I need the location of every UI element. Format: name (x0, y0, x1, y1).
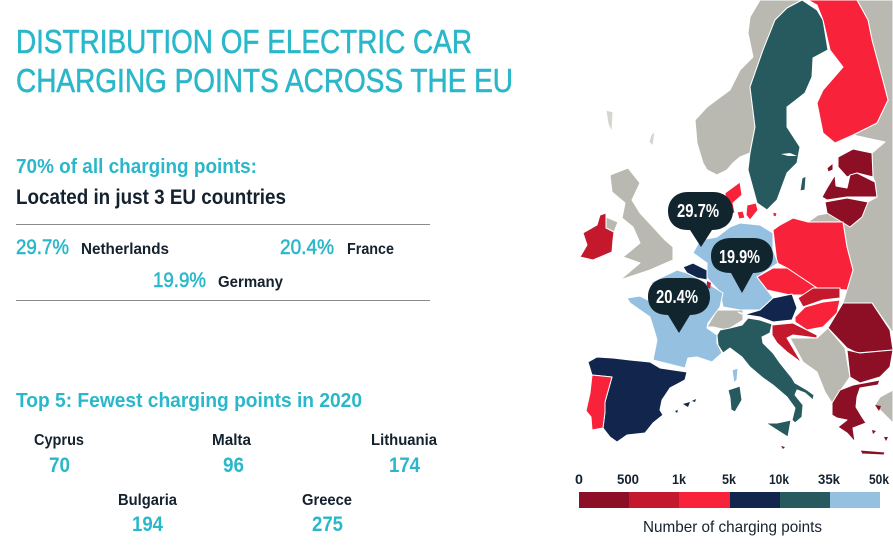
Romania (828, 303, 893, 353)
Luxembourg (707, 281, 711, 289)
panel: top three countries: 29.7% (16, 236, 69, 259)
callout: Germany 19.9%: 19.9% (719, 247, 760, 267)
non-EU land: Russia, Belarus, Ukraine (843, 0, 893, 333)
legend: 50k (869, 471, 889, 487)
Sweden (748, 0, 828, 210)
panel: fewest charging points list: Bulgaria (118, 492, 177, 509)
Aegean islands (872, 405, 888, 441)
Denmark: Jutland (725, 182, 742, 215)
panel: fewest charging points list: Lithuania (371, 432, 437, 449)
legend: 500 (617, 471, 639, 487)
Denmark: Zealand (746, 203, 758, 220)
Spain (588, 357, 687, 442)
legend (575, 471, 889, 536)
panel: fewest charging points list: Malta (212, 432, 251, 449)
Austria (738, 294, 797, 322)
non-EU land: Switzerland (707, 310, 743, 330)
panel: top three countries: Netherlands (81, 241, 169, 258)
callout: France 20.4%: 20.4% (656, 287, 698, 307)
Slovakia (798, 288, 840, 307)
Belgium (683, 263, 707, 280)
panel: top three countries: Germany (218, 274, 283, 291)
panel: top three countries (16, 224, 430, 300)
title: DISTRIBUTION OF ELECTRIC CAR (16, 23, 472, 60)
heading: 70% of charging points: Located in just 3 EU countries (16, 186, 286, 209)
panel: fewest charging points list: 70 (49, 454, 70, 477)
Sicily (766, 420, 791, 437)
Italy (717, 318, 814, 423)
Denmark: Bornholm (773, 212, 777, 217)
panel: fewest charging points list: 174 (389, 454, 420, 477)
non-EU land: Kaliningrad (808, 212, 843, 222)
non-EU land: Western Balkans (790, 328, 850, 403)
heading: fewest charging points: Top 5: Fewest charging points in 2020 (16, 390, 362, 412)
Portugal (586, 375, 612, 430)
legend: 1k (672, 471, 686, 487)
Latvia (822, 173, 877, 200)
panel: top three countries: France (347, 241, 394, 258)
panel: fewest charging points list: Greece (302, 492, 352, 509)
Sardinia (728, 386, 742, 412)
Slovenia and Croatia (772, 323, 817, 363)
panel: fewest charging points list: 194 (132, 513, 163, 536)
France (627, 270, 723, 368)
Czech Republic (757, 268, 817, 295)
non-EU land: United Kingdom (610, 168, 673, 280)
non-EU land: Turkey (875, 390, 893, 423)
Germany and Netherlands (693, 223, 778, 310)
Gotland (800, 176, 806, 191)
Balearic Islands (675, 399, 696, 413)
Denmark: Funen (737, 211, 745, 219)
Estonia (838, 149, 873, 177)
panel: top three countries: 19.9% (153, 269, 206, 292)
legend: 35k (818, 471, 840, 487)
heading: 70% of charging points: 70% of all charging points: (16, 156, 257, 178)
Bulgaria (847, 350, 893, 383)
legend: 5k (722, 471, 736, 487)
Estonian islands (827, 163, 833, 172)
panel: top three countries: 20.4% (280, 236, 334, 259)
title (16, 23, 513, 99)
Finland (808, 0, 888, 143)
callout: France 20.4% (648, 278, 710, 333)
Greece (832, 380, 880, 442)
map of Europe (580, 0, 893, 455)
callout: Netherlands 29.7%: 29.7% (677, 201, 719, 221)
callout: Germany 19.9% (711, 238, 773, 293)
title: CHARGING POINTS ACROSS THE EU (16, 62, 513, 99)
Swedish lakes (781, 153, 797, 156)
panel: fewest charging points list: 96 (223, 454, 244, 477)
panel: fewest charging points list (34, 432, 437, 536)
panel: fewest charging points list: Cyprus (34, 432, 84, 449)
Corsica (732, 368, 738, 383)
legend: Number of charging points (643, 519, 822, 536)
Poland (773, 218, 853, 290)
Malta (781, 446, 785, 449)
heading: 70% of charging points (16, 156, 286, 209)
Crete (860, 450, 885, 455)
Atlantic islands (606, 110, 655, 146)
callout: Netherlands 29.7% (668, 192, 733, 247)
non-EU land: Northern Ireland (606, 217, 618, 232)
non-EU land: Norway (695, 0, 802, 175)
Hungary (795, 300, 840, 330)
Lithuania (825, 198, 868, 227)
legend: 0 (575, 471, 583, 487)
legend: 10k (769, 471, 789, 487)
Ireland (580, 213, 614, 260)
panel: fewest charging points list: 275 (312, 513, 343, 536)
